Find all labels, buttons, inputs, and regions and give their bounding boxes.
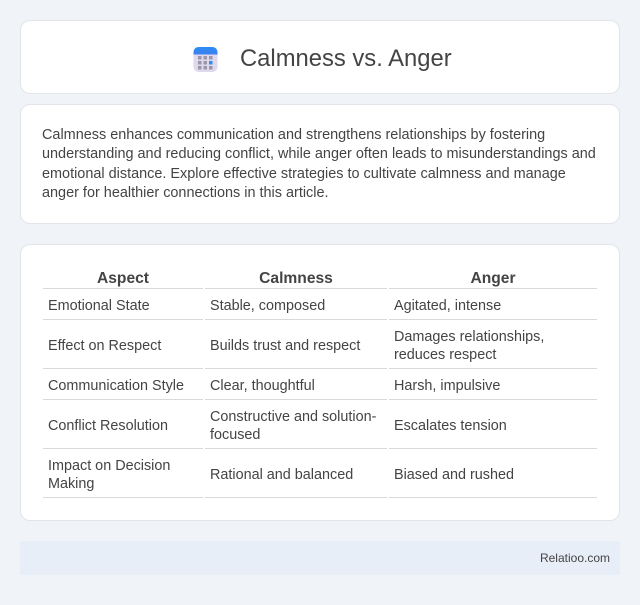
- cell: Biased and rushed: Biased and rushed: [394, 467, 514, 483]
- header: Anger: Anger: [470, 270, 516, 287]
- row: Conflict Resolution: Conflict Resolution: [48, 418, 168, 434]
- cell: Escalates tension: Escalates tension: [394, 418, 507, 434]
- panel: title card: [20, 20, 620, 94]
- cell: Clear, thoughtful: Clear, thoughtful: [210, 378, 315, 394]
- cell: Constructive and solution-focused: focused: [210, 427, 260, 443]
- row: Emotional State: Emotional State: [48, 298, 150, 314]
- intro text: understanding and reducing conflict, while anger often leads to misunderstandings and: [42, 146, 596, 162]
- cell: Damages relationships, reduces respect: [394, 329, 544, 363]
- cell: Constructive and solution-focused: Constructive and solution-: [210, 409, 376, 425]
- row: Impact on Decision Making: [48, 458, 170, 492]
- cell: Damages relationships, reduces respect: reduces respect: [394, 347, 496, 363]
- intro text: Calmness enhances communication and strengthens relationships by fostering: [42, 126, 545, 142]
- cell: Damages relationships, reduces respect: Damages relationships,: [394, 329, 544, 345]
- cell: Rational and balanced: Rational and balanced: [210, 467, 353, 483]
- footer text: Relatioo.com: [540, 551, 610, 565]
- cell: Harsh, impulsive: Harsh, impulsive: [394, 378, 500, 394]
- row: Effect on Respect: Effect on Respect: [48, 338, 161, 354]
- header: Aspect: Aspect: [97, 270, 149, 287]
- intro text: [42, 126, 596, 201]
- cell: Builds trust and respect: Builds trust and respect: [210, 338, 360, 354]
- cell: Stable, composed: Stable, composed: [210, 298, 325, 314]
- row: Communication Style: Communication Style: [48, 378, 184, 394]
- intro text: emotional distance. Explore effective strategies to cultivate calmness and manage: [42, 166, 566, 182]
- row: Impact on Decision Making: Impact on Decision: [48, 458, 170, 474]
- intro text: anger for healthier connections in this article.: [42, 185, 329, 201]
- row: Impact on Decision Making: Making: [48, 476, 94, 492]
- title: Calmness vs. Anger: [240, 45, 452, 72]
- panel: comparison table: [20, 244, 620, 521]
- panel: intro: [20, 104, 620, 224]
- header: Calmness: Calmness: [259, 270, 333, 287]
- cell: Agitated, intense: Agitated, intense: [394, 298, 501, 314]
- cell: Constructive and solution-focused: [210, 409, 376, 443]
- icon: calendar: [194, 47, 218, 72]
- footer bar: [20, 541, 620, 575]
